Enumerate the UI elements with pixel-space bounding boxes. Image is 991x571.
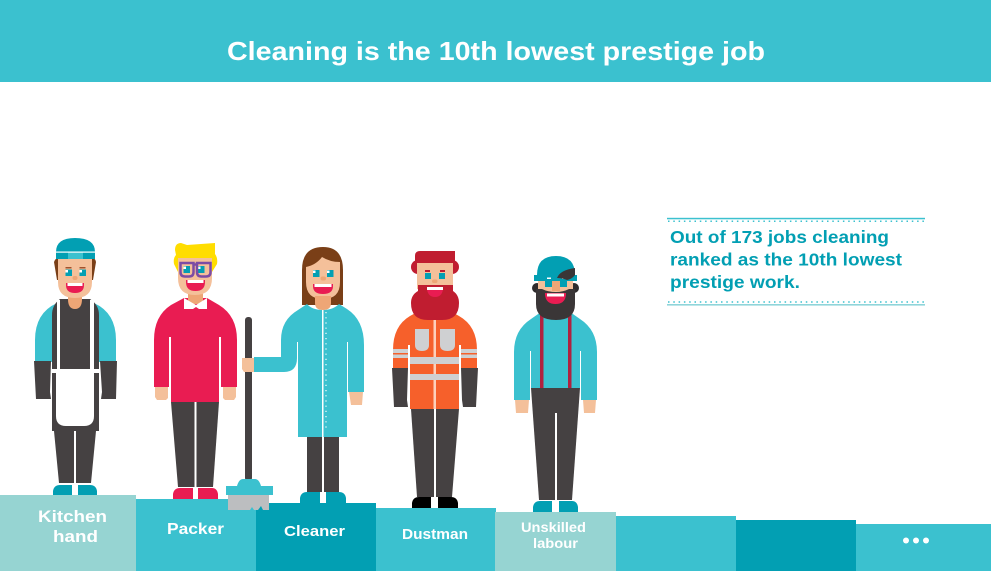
ears <box>532 283 542 293</box>
face <box>178 258 212 295</box>
apron back <box>52 299 99 431</box>
mouth <box>313 284 333 294</box>
trousers <box>411 409 459 497</box>
nose <box>72 276 78 280</box>
eyes <box>184 266 204 273</box>
neck <box>68 296 82 309</box>
hair <box>54 257 96 280</box>
step: kitchen hand: hand <box>53 527 98 546</box>
hands <box>155 387 236 400</box>
jacket <box>393 305 477 409</box>
mouth <box>545 293 566 304</box>
step: cleaner <box>256 503 376 571</box>
mouth <box>66 283 84 293</box>
boots <box>412 497 458 508</box>
glasses <box>180 263 210 276</box>
hair <box>302 247 343 305</box>
step: unskilled labour: labour <box>533 536 579 551</box>
shoes <box>173 488 218 499</box>
neck <box>315 296 331 310</box>
gloves <box>392 368 478 407</box>
step: packer: Packer <box>167 521 224 538</box>
step: unskilled labour: Unskilled <box>521 520 586 535</box>
hair tuft <box>557 268 575 280</box>
callout: Out of 173 jobs cleaning <box>670 227 889 247</box>
gloves <box>34 361 117 399</box>
trousers <box>171 402 219 487</box>
eyes <box>425 273 445 279</box>
hands <box>242 358 363 405</box>
legs <box>54 431 96 483</box>
eyebrows <box>66 267 86 268</box>
high-vis stripes <box>393 349 477 380</box>
step: blank <box>616 516 736 571</box>
pockets <box>415 329 455 351</box>
trousers <box>531 388 580 500</box>
hat <box>411 260 425 274</box>
eyes <box>66 270 86 276</box>
coat seam and buttons <box>322 310 324 437</box>
mouth <box>427 287 443 297</box>
eyes <box>545 281 567 287</box>
mop <box>226 317 273 510</box>
step: kitchen hand <box>0 495 136 571</box>
callout: ranked as the 10th lowest <box>670 250 902 270</box>
callout: prestige work. <box>670 272 800 292</box>
title: Cleaning is the 10th lowest prestige job <box>227 36 765 66</box>
figure: kitchen hand <box>34 238 117 495</box>
step: kitchen hand: Kitchen <box>38 507 107 526</box>
neck <box>188 290 203 304</box>
hair <box>174 243 217 272</box>
figure: dustman <box>392 251 478 508</box>
staircase of job steps <box>0 495 991 571</box>
apron straps and bib <box>52 300 99 426</box>
mouth <box>186 280 205 291</box>
hat <box>537 256 575 275</box>
figure: cleaner with mop <box>226 247 364 510</box>
face <box>58 259 92 298</box>
step: dustman: Dustman <box>402 527 468 543</box>
nose <box>432 280 438 283</box>
beard <box>536 289 575 320</box>
shoes <box>533 501 578 512</box>
jacket seam <box>434 318 436 409</box>
step: packer <box>136 499 256 571</box>
figure: unskilled labourer <box>514 256 597 512</box>
sleeves <box>35 303 116 362</box>
eyes <box>313 270 334 277</box>
step: cleaner: Cleaner <box>284 523 345 540</box>
hands <box>515 400 596 413</box>
collar <box>184 298 207 309</box>
step: unskilled labour <box>495 512 616 571</box>
shoes <box>53 485 97 495</box>
step: ellipsis <box>856 524 991 571</box>
step: dustman <box>376 508 496 571</box>
sweater <box>154 298 237 402</box>
nose <box>320 276 326 280</box>
step: blank dark <box>736 520 856 571</box>
hat <box>56 238 95 252</box>
face <box>538 279 573 299</box>
coat <box>254 304 364 437</box>
shoes <box>300 492 346 503</box>
header banner <box>0 0 991 82</box>
face <box>306 257 340 299</box>
braces <box>540 314 572 388</box>
callout <box>667 218 925 306</box>
sweater <box>514 312 597 400</box>
beard <box>411 285 459 320</box>
figure: packer <box>154 243 237 499</box>
face <box>417 263 453 289</box>
trousers <box>307 437 339 492</box>
